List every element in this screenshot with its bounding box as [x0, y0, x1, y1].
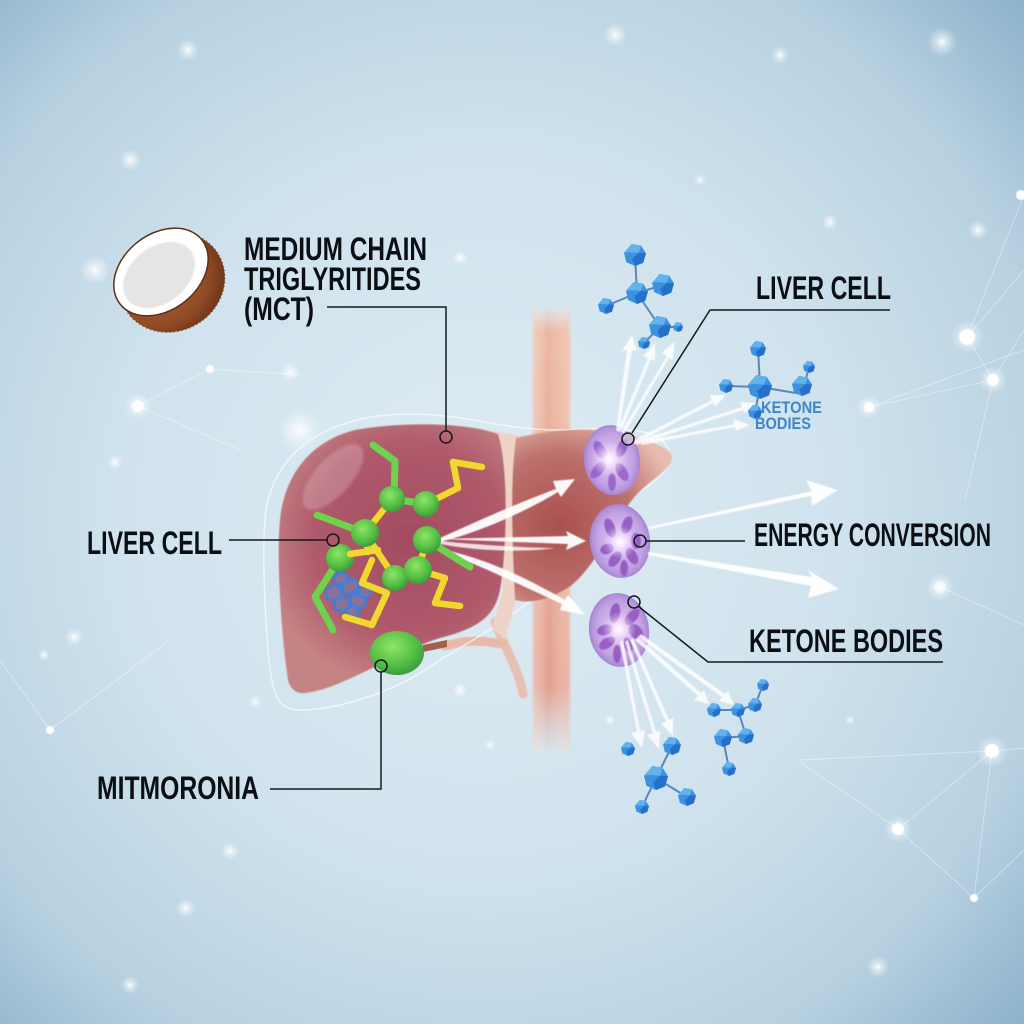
- lower vessel branches: [445, 622, 523, 694]
- callout: liver cell top right: LIVER CELL: [756, 270, 891, 306]
- ketone molecule: top: [598, 244, 683, 349]
- arrow: energy up: [648, 480, 838, 529]
- arrows from fatty acid to mitochondria: [440, 479, 586, 615]
- small label: ketone bodies: KETONE: [761, 398, 822, 417]
- green chains: [315, 445, 470, 630]
- icon: coconut: [97, 210, 243, 351]
- arrow: energy down: [648, 552, 839, 598]
- callout: mitmoronia: [97, 660, 387, 806]
- callout: energy conversion: [634, 517, 991, 553]
- callout: ketone bodies: [628, 596, 943, 662]
- overlapping yellow bond: [350, 550, 378, 554]
- callout: MCT label: (MCT): [244, 291, 314, 327]
- small label: ketone bodies: BODIES: [755, 414, 811, 433]
- small label: ketone bodies: [755, 398, 822, 433]
- callout: liver cell top right: [622, 270, 891, 445]
- liver: [279, 424, 672, 693]
- blue ring cluster: [326, 572, 371, 618]
- callout: MCT label: [244, 231, 452, 443]
- callout: liver cell left: LIVER CELL: [87, 525, 222, 561]
- liver thin outline: [264, 414, 670, 710]
- liver right lobe: [512, 430, 672, 601]
- arrows: bottom mitochondrion to lower molecules: [620, 634, 734, 749]
- ketone molecule: lower left: [621, 737, 696, 814]
- blood vessel: [533, 308, 570, 754]
- arrows: top mitochondrion to right molecule: [632, 395, 757, 445]
- liver connecting band: [484, 430, 524, 640]
- liver left lobe: [279, 424, 506, 693]
- fatty acid molecule on liver: [315, 445, 482, 630]
- callout: ketone bodies: KETONE BODIES: [749, 623, 943, 659]
- arrows: top mitochondrion to upper molecule: [616, 335, 675, 434]
- background network lines and nodes: [0, 190, 1024, 902]
- mitochondrion: bottom: [585, 590, 653, 670]
- mitochondrion: top: [581, 423, 643, 497]
- liver highlight: [292, 434, 374, 520]
- ketone molecule: right: [719, 341, 815, 419]
- callout: MCT label: TRIGLYRITIDES: [244, 261, 421, 297]
- green atoms: [326, 486, 441, 591]
- callout: mitmoronia: MITMORONIA: [97, 770, 259, 806]
- ketone molecule: lower right: [707, 679, 769, 776]
- mitochondrion: middle: [586, 501, 654, 581]
- yellow chains: [345, 462, 482, 625]
- green organelle: [370, 631, 447, 675]
- callout: MCT label: MEDIUM CHAIN: [244, 231, 427, 267]
